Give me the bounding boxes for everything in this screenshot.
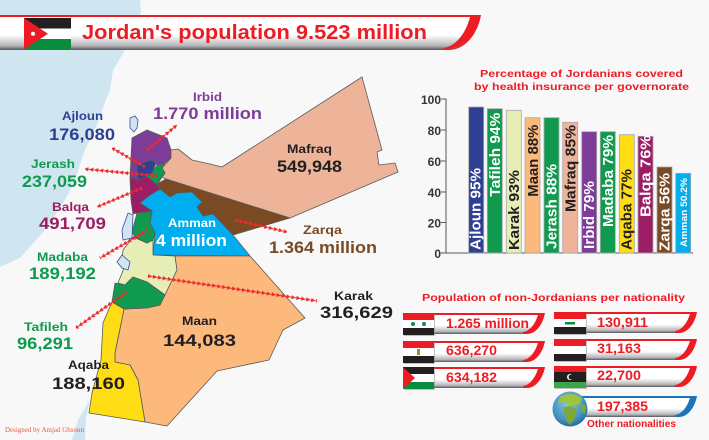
region: Irbid	[130, 130, 171, 180]
row: Palestine	[403, 367, 545, 390]
bar labels: Maan 88%	[526, 125, 542, 197]
row: Syria	[403, 313, 545, 336]
label: Balqa: 491,709	[39, 215, 106, 233]
bar labels: Ajloun 95%	[469, 168, 485, 250]
region: Balqa	[130, 176, 160, 214]
label: Amman: 4 million	[156, 232, 227, 250]
arrow: Balqa	[96, 186, 143, 209]
label: Ajloun: 176,080	[49, 126, 115, 144]
label: Irbid: 1.770 million	[153, 105, 262, 123]
region: Madaba	[132, 211, 155, 243]
arrows	[75, 123, 317, 330]
label: Madaba: Madaba	[37, 250, 88, 264]
arrow: Karak	[148, 274, 317, 303]
chart heading: Percentage of Jordanians covered	[480, 68, 683, 80]
row: Libya	[554, 366, 697, 389]
label: Mafraq	[277, 142, 342, 176]
label: Amman	[156, 216, 227, 250]
row: Iraq	[554, 312, 697, 335]
nationality heading: Population of non-Jordanians per nationality	[422, 292, 685, 304]
label: Mafraq: Mafraq	[287, 142, 332, 156]
bar: Zarqa	[657, 167, 672, 253]
region: Maan	[115, 256, 305, 426]
bar labels: Amman 50.2%	[679, 177, 690, 247]
region: Aqaba	[89, 302, 145, 422]
label: Irbid: Irbid	[193, 90, 222, 104]
label: Maan: Maan	[182, 314, 217, 328]
bar: Karak	[506, 110, 521, 253]
bar: Madaba	[600, 132, 615, 253]
bars	[469, 107, 691, 253]
label: Ajloun	[49, 109, 115, 144]
label: Tafileh: Tafileh	[24, 320, 68, 334]
row: Yemen: 31,163	[597, 341, 642, 356]
label: Maan: 144,083	[163, 332, 236, 350]
bar labels: Karak 93%	[507, 170, 523, 250]
row: other nationalities: Other nationalities	[587, 419, 676, 430]
row: other nationalities	[552, 392, 697, 430]
bar labels: Tafileh 94%	[488, 113, 504, 197]
arrow: Jerash	[85, 166, 158, 178]
region: Karak	[118, 237, 177, 295]
axes	[441, 99, 693, 253]
label: Zarqa: Zarqa	[303, 223, 342, 237]
arrow: Madaba	[99, 228, 149, 260]
panel: non-Jordanians by nationality	[403, 292, 697, 430]
map of Jordan	[89, 77, 398, 426]
axis labels	[421, 93, 441, 261]
label: Aqaba: Aqaba	[68, 358, 109, 372]
bar labels: Balqa 76%	[639, 135, 655, 217]
label: Irbid	[153, 90, 262, 123]
bar: Ajloun	[469, 107, 484, 253]
chart heading: by health insurance per governorate	[474, 81, 689, 93]
sea	[0, 0, 141, 440]
map labels	[17, 90, 393, 393]
bar: Jerash	[544, 118, 559, 253]
label: Jerash: Jerash	[31, 157, 75, 171]
region: Ajloun	[137, 160, 156, 180]
label: Aqaba: 188,160	[52, 375, 125, 393]
label: Mafraq: 549,948	[277, 158, 342, 176]
axis labels: 100	[421, 93, 441, 107]
row: other nationalities: 197,385	[597, 399, 648, 414]
region: Zarqa	[157, 179, 290, 235]
row: Syria: 1.265 million	[446, 316, 529, 331]
bar: Maan	[525, 118, 540, 253]
label: Balqa	[39, 200, 106, 233]
axis labels: 20	[428, 216, 441, 230]
row: Egypt	[403, 341, 545, 364]
bar labels: Mafraq 85%	[564, 125, 580, 212]
label: Zarqa: 1.364 million	[269, 239, 377, 257]
label: Madaba: 189,192	[29, 265, 96, 283]
bar: Mafraq	[563, 122, 578, 253]
lakes	[117, 116, 138, 270]
label: Jerash	[22, 157, 87, 191]
bar: Amman	[676, 173, 691, 253]
bar: Tafileh	[487, 109, 502, 253]
bar labels: Irbid 79%	[582, 181, 598, 249]
title banner	[0, 15, 481, 50]
title: Jordan's population 9.523 million	[82, 21, 427, 44]
chart heading	[474, 68, 689, 93]
region: Tafileh	[112, 277, 165, 309]
region: Mafraq	[162, 77, 398, 218]
region: Jerash	[147, 163, 165, 185]
region: Amman	[140, 189, 250, 256]
label: Tafileh: 96,291	[17, 335, 73, 353]
bar labels	[469, 113, 690, 251]
bar: Irbid	[582, 132, 597, 253]
bar: Aqaba	[619, 135, 634, 253]
label: Karak: 316,629	[320, 304, 393, 322]
bar: Balqa	[638, 136, 653, 253]
axis labels: 60	[428, 155, 441, 169]
panel: health insurance chart	[421, 68, 693, 261]
bar labels: Madaba 79%	[601, 135, 617, 227]
label: Madaba	[29, 250, 96, 283]
label: Aqaba	[52, 358, 125, 393]
bar labels: Jerash 88%	[545, 164, 561, 249]
arrow: Tafileh	[75, 290, 128, 330]
arrow: Irbid	[145, 123, 179, 152]
label: Ajloun: Ajloun	[62, 109, 103, 123]
row: Egypt: 636,270	[446, 343, 497, 358]
label: Jerash: 237,059	[22, 173, 87, 191]
icon: Jordan flag	[24, 18, 71, 50]
row: Palestine: 634,182	[446, 370, 497, 385]
label: Karak	[320, 289, 393, 322]
arrow: Zarqa	[234, 218, 288, 234]
bar labels: Aqaba 77%	[620, 169, 636, 250]
label: Maan	[163, 314, 236, 350]
label: Tafileh	[17, 320, 73, 353]
axis labels: 80	[428, 124, 441, 138]
axis labels: 40	[428, 186, 441, 200]
icon: globe	[552, 392, 588, 426]
row: Libya: 22,700	[597, 368, 641, 383]
label: Balqa: Balqa	[52, 200, 89, 214]
bar labels: Zarqa 56%	[657, 173, 673, 251]
label: Karak: Karak	[334, 289, 373, 303]
arrow: Ajloun	[111, 146, 146, 169]
label: Zarqa	[269, 223, 377, 257]
row: Iraq: 130,911	[597, 315, 649, 330]
credit: Designed by Amjad Ghsoun	[5, 425, 84, 434]
axis labels: 0	[434, 247, 441, 261]
label: Amman: Amman	[168, 216, 216, 230]
row: Yemen	[554, 339, 697, 362]
